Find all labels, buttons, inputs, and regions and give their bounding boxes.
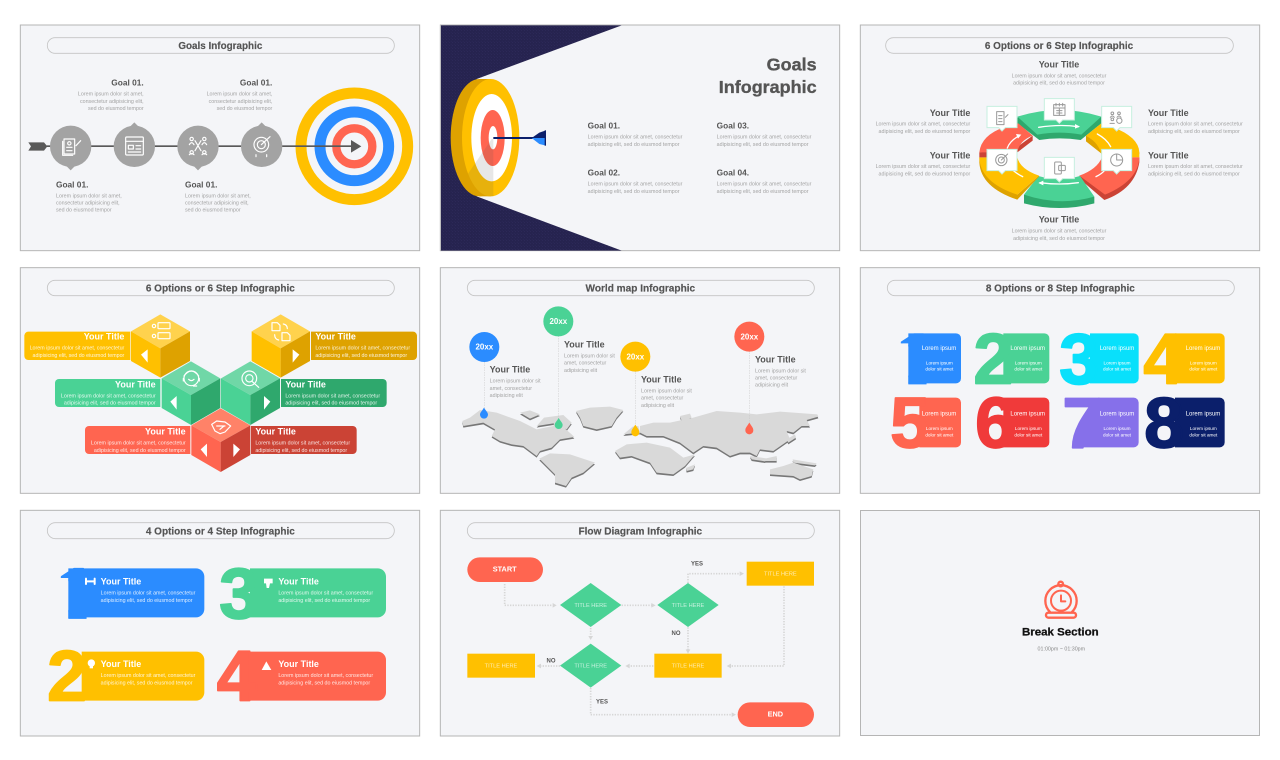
card 3 green: Lorem ipsum dolor sit amet, consectetur xyxy=(278,591,373,597)
icon: network people xyxy=(189,137,207,155)
card 5 xyxy=(890,384,961,464)
connectors xyxy=(505,571,784,717)
title pill xyxy=(467,523,814,539)
text: goal 01: Lorem ipsum dolor sit amet, consectetur xyxy=(588,135,683,141)
text: top xyxy=(1012,59,1107,87)
card 8: Lorem ipsum xyxy=(1186,412,1220,418)
text: goal 02: adipisicing elit, sed do eiusmod tempor xyxy=(588,189,680,195)
card 3 xyxy=(1059,319,1139,399)
text: lower right: adipisicing elit, sed do eiusmod tempor xyxy=(1148,171,1240,177)
decision labels xyxy=(547,562,703,706)
card 7: Lorem ipsum xyxy=(1104,426,1131,431)
bar: dark red right xyxy=(251,426,357,454)
text: goal 04: Lorem ipsum dolor sit amet, consectetur xyxy=(717,182,812,188)
title pill xyxy=(467,280,814,296)
text: goal bottom 1: Goal 01. xyxy=(56,179,88,189)
text: goal top 1 xyxy=(78,78,144,112)
text: goal top 2: Lorem ipsum dolor sit amet, xyxy=(207,92,272,98)
text: lower right: Your Title xyxy=(1148,150,1189,160)
box middle xyxy=(654,654,722,678)
title pill xyxy=(887,280,1234,296)
cube: yellow left xyxy=(131,314,190,378)
callout icon: calendar xyxy=(1044,99,1074,123)
ring segment: left yellow xyxy=(979,157,1039,200)
card 8: dolor sit amet xyxy=(1189,432,1218,437)
text: upper left: Lorem ipsum dolor sit amet, consectetur xyxy=(876,122,971,128)
title pill: 6 Options or 6 Step Infographic xyxy=(146,284,295,295)
text: green xyxy=(564,340,615,374)
card 1: Lorem ipsum xyxy=(922,346,956,352)
card 2 yellow: Lorem ipsum dolor sit amet, consectetur xyxy=(101,673,196,679)
text: goal top 2: consectetur adipisicing elit, xyxy=(209,99,272,105)
card 4 red xyxy=(217,637,386,717)
card 2 yellow: 2 xyxy=(47,637,87,717)
title pill xyxy=(886,38,1233,53)
text: top: adipisicing elit, sed do eiusmod tempor xyxy=(1013,81,1105,87)
bar: dark yellow right: Your Title xyxy=(315,332,356,342)
dart xyxy=(493,130,546,146)
break time: 01:00pm ~ 01:30pm xyxy=(1038,647,1086,653)
decision labels: NO xyxy=(547,658,556,664)
cube: red xyxy=(191,408,250,472)
step circles xyxy=(50,122,282,170)
start pill: START xyxy=(493,565,517,574)
world map xyxy=(462,407,818,488)
box left xyxy=(467,654,535,678)
text: goal bottom 1: Lorem ipsum dolor sit amet, xyxy=(56,193,122,199)
card 3 green: Your Title xyxy=(278,577,319,587)
text: goal 03: Goal 03. xyxy=(717,120,749,130)
card 7 xyxy=(1062,384,1139,464)
box left: TITLE HERE xyxy=(485,664,518,670)
text: goal 02: Goal 02. xyxy=(588,168,620,178)
callout icon: document xyxy=(987,106,1017,131)
diamond 1: TITLE HERE xyxy=(574,603,607,609)
panel: 8 step numbers xyxy=(860,268,1260,493)
text: goal 01: Goal 01. xyxy=(588,120,620,130)
card 7: 7 xyxy=(1062,384,1102,464)
card 2 yellow: Your Title xyxy=(101,659,141,669)
card 5: dolor sit amet xyxy=(925,432,954,437)
bar: red left xyxy=(85,426,190,454)
cube: green left xyxy=(162,361,220,425)
marker: blue: 20xx xyxy=(475,343,494,352)
card 1 xyxy=(900,333,961,384)
card 2: 2 xyxy=(973,319,1013,399)
bar: red left: Your Title xyxy=(145,427,186,437)
card 3: dolor sit amet xyxy=(1103,367,1132,372)
text: goal top 2: sed do eiusmod tempor xyxy=(217,106,273,112)
card 3 green: adipisicing elit, sed do eiusmod tempor xyxy=(278,598,370,604)
text: goal top 1: Goal 01. xyxy=(111,78,144,88)
marker: green: 20xx xyxy=(549,317,568,326)
heading: Infographic xyxy=(719,77,817,97)
box top right: TITLE HERE xyxy=(764,572,797,578)
bar: green left: adipisicing elit, sed do eiusmod tempor xyxy=(64,401,156,407)
text: lower left: Lorem ipsum dolor sit amet, consectetur xyxy=(876,164,971,170)
panel: 6 step cubes xyxy=(20,268,420,493)
text: red xyxy=(755,355,806,389)
card 2 xyxy=(973,319,1049,399)
text: goal 04 xyxy=(717,168,812,195)
text: yellow: Lorem ipsum dolor sit xyxy=(641,388,692,394)
text: goal 04: Goal 04. xyxy=(717,168,749,178)
bar: red left: adipisicing elit, sed do eiusmod tempor xyxy=(94,448,186,454)
start pill xyxy=(467,557,543,582)
text: lower left xyxy=(876,150,971,177)
box top right xyxy=(747,562,814,586)
card 3 green xyxy=(219,554,386,634)
text: lower left: adipisicing elit, sed do eiusmod tempor xyxy=(879,171,971,177)
bar: dark yellow right: adipisicing elit, sed do eiusmod tempor xyxy=(315,353,407,359)
card 1 blue: 1 xyxy=(57,554,97,634)
text: goal 01 xyxy=(588,120,683,148)
panel: world map xyxy=(440,268,840,493)
card 4: Lorem ipsum xyxy=(1190,360,1217,365)
card 8 xyxy=(1144,384,1225,464)
panel: 6 step ring xyxy=(860,25,1260,251)
card 6: Lorem ipsum xyxy=(1015,426,1042,431)
bar: yellow left xyxy=(24,332,130,360)
card 4 red: Lorem ipsum dolor sit amet, consectetur xyxy=(278,673,373,679)
card 4 xyxy=(1143,319,1225,399)
card 4 red: adipisicing elit, sed do eiusmod tempor xyxy=(278,680,370,686)
target rings xyxy=(301,93,408,200)
text: goal bottom 2 xyxy=(185,179,251,214)
card 2: dolor sit amet xyxy=(1014,367,1043,372)
ring segment: bottom green xyxy=(1024,176,1094,208)
bar: red left: Lorem ipsum dolor sit amet, consectetur xyxy=(91,441,186,447)
card 3: Lorem ipsum xyxy=(1100,346,1134,352)
text: top: Your Title xyxy=(1039,59,1079,69)
title pill: Goals Infographic xyxy=(178,41,263,52)
icon: target with dart xyxy=(254,137,270,157)
3D target xyxy=(451,79,519,201)
end pill: END xyxy=(768,710,783,719)
bar: dark red right: adipisicing elit, sed do eiusmod tempor xyxy=(255,448,347,454)
break heading: Break Section xyxy=(1022,626,1099,638)
ring segment: right yellow xyxy=(1086,123,1139,157)
card 8: 8 xyxy=(1144,384,1184,464)
bar: green left xyxy=(55,379,160,407)
text: blue: adipisicing elit xyxy=(490,393,523,399)
panel: goals infographic timeline xyxy=(20,25,420,251)
card 4 red: 4 xyxy=(217,637,257,717)
callout icon: target xyxy=(987,149,1017,174)
card 4: Lorem ipsum xyxy=(1186,346,1220,352)
card 1 blue: Lorem ipsum dolor sit amet, consectetur xyxy=(101,591,196,597)
heading xyxy=(719,55,817,97)
text: bottom: adipisicing elit, sed do eiusmod tempor xyxy=(1013,236,1105,242)
text: goal top 2 xyxy=(207,78,273,112)
title pill: 4 Options or 4 Step Infographic xyxy=(146,526,295,537)
text: upper left: Your Title xyxy=(930,108,970,118)
diamond 3: TITLE HERE xyxy=(574,664,607,670)
text: red: amet, consectetur xyxy=(755,376,798,382)
card 6: 6 xyxy=(975,384,1015,464)
card 1: dolor sit amet xyxy=(925,367,954,372)
text: goal bottom 2: Lorem ipsum dolor sit amet, xyxy=(185,193,251,199)
title pill xyxy=(47,523,394,539)
text: upper right xyxy=(1148,108,1243,135)
text: goal 01: adipisicing elit, sed do eiusmod tempor xyxy=(588,142,680,148)
text: green: amet, consectetur xyxy=(564,361,607,367)
text: red: adipisicing elit xyxy=(755,383,789,389)
card 6: dolor sit amet xyxy=(1014,432,1043,437)
card 7: Lorem ipsum xyxy=(1100,412,1134,418)
icon: pocket clock xyxy=(1045,582,1077,618)
text: yellow: adipisicing elit xyxy=(641,403,675,409)
title pill: World map Infographic xyxy=(585,284,695,295)
text: green: adipisicing elit xyxy=(564,368,598,374)
text: goal 03 xyxy=(717,120,812,148)
end pill xyxy=(738,702,814,727)
text: goal bottom 1: consectetur adipisicing elit, xyxy=(56,201,120,207)
diamond 1 xyxy=(560,583,621,627)
text: lower left: Your Title xyxy=(930,150,970,160)
heading: Goals xyxy=(767,55,817,75)
bar: dark red right: Your Title xyxy=(255,427,296,437)
icon: browser window xyxy=(126,137,143,155)
text: goal 02 xyxy=(588,168,683,195)
decision labels: NO xyxy=(672,631,681,637)
bar: green left: Lorem ipsum dolor sit amet, consectetur xyxy=(61,394,156,400)
text: top: Lorem ipsum dolor sit amet, consectetur xyxy=(1012,73,1107,79)
text: blue: amet, consectetur xyxy=(490,386,532,392)
card 4 red: Your Title xyxy=(278,659,319,669)
ring segment: right red xyxy=(1079,157,1139,200)
text: goal 04: adipisicing elit, sed do eiusmod tempor xyxy=(717,189,809,195)
ring segment: top green xyxy=(1017,110,1101,140)
cube: yellow right xyxy=(252,314,310,378)
panel: 4 step numbers xyxy=(20,510,420,736)
card 7: dolor sit amet xyxy=(1103,432,1132,437)
text: green: Your Title xyxy=(564,340,605,350)
cube: green right xyxy=(221,361,280,425)
bar: dark yellow right xyxy=(311,332,417,360)
panel: goals infographic dart xyxy=(440,25,840,251)
card 3 green: 3 xyxy=(219,554,259,634)
text: goal bottom 2: sed do eiusmod tempor xyxy=(185,208,241,214)
title pill xyxy=(47,38,394,53)
card 1 blue: Your Title xyxy=(101,577,141,587)
bar: dark green right xyxy=(281,379,387,407)
marker: red: 20xx xyxy=(740,332,759,341)
marker: yellow xyxy=(620,342,650,436)
marker: yellow: 20xx xyxy=(626,352,645,361)
panel: break section xyxy=(860,510,1260,736)
title pill: 8 Options or 8 Step Infographic xyxy=(986,284,1135,295)
callout icon: phone message xyxy=(1044,157,1074,182)
bar: dark red right: Lorem ipsum dolor sit amet, consectetur xyxy=(255,441,350,447)
text: bottom: Your Title xyxy=(1039,214,1079,224)
callout icon: pie chart xyxy=(1102,149,1132,174)
diamond 3 xyxy=(560,644,621,688)
text: upper right: adipisicing elit, sed do eiusmod tempor xyxy=(1148,129,1240,135)
card 2 yellow xyxy=(47,637,204,717)
box middle: TITLE HERE xyxy=(672,664,705,670)
card 2: Lorem ipsum xyxy=(1010,346,1045,352)
arrow through target xyxy=(28,140,361,153)
bar: dark green right: Lorem ipsum dolor sit amet, consectetur xyxy=(285,394,380,400)
text: goal bottom 1: sed do eiusmod tempor xyxy=(56,208,112,214)
bar: yellow left: Lorem ipsum dolor sit amet, consectetur xyxy=(30,346,125,352)
bar: green left: Your Title xyxy=(115,380,156,390)
text: blue xyxy=(490,365,541,399)
text: goal bottom 2: Goal 01. xyxy=(185,179,217,189)
text: upper right: Lorem ipsum dolor sit amet, consectetur xyxy=(1148,122,1243,128)
card 4: 4 xyxy=(1143,319,1183,399)
text: goal bottom 1 xyxy=(56,179,122,214)
title pill: Flow Diagram Infographic xyxy=(578,526,702,537)
dark wedge background xyxy=(441,25,622,251)
text: yellow: Your Title xyxy=(641,375,682,385)
bar: dark yellow right: Lorem ipsum dolor sit amet, consectetur xyxy=(315,346,410,352)
diamond 2 xyxy=(657,583,719,627)
text: goal top 2: Goal 01. xyxy=(240,78,272,88)
card 2 yellow: adipisicing elit, sed do eiusmod tempor xyxy=(101,680,193,686)
text: red: Your Title xyxy=(755,355,796,365)
marker: red xyxy=(734,322,764,434)
card 6 xyxy=(975,384,1049,464)
text: goal 02: Lorem ipsum dolor sit amet, consectetur xyxy=(588,182,683,188)
text: goal top 1: Lorem ipsum dolor sit amet, xyxy=(78,92,144,98)
callout icon: people xyxy=(1102,106,1132,131)
card 3: Lorem ipsum xyxy=(1104,360,1131,365)
card 1: Lorem ipsum xyxy=(926,360,953,365)
card 4: dolor sit amet xyxy=(1189,367,1218,372)
text: goal 03: Lorem ipsum dolor sit amet, consectetur xyxy=(717,135,812,141)
card 1 blue xyxy=(60,568,204,619)
title pill: 6 Options or 6 Step Infographic xyxy=(985,41,1133,52)
text: lower right: Lorem ipsum dolor sit amet, consectetur xyxy=(1148,164,1243,170)
text: goal top 1: sed do eiusmod tempor xyxy=(88,106,144,112)
diamond 2: TITLE HERE xyxy=(672,603,705,609)
card 8: Lorem ipsum xyxy=(1190,426,1217,431)
text: goal top 1: consectetur adipisicing elit, xyxy=(80,99,144,105)
text: blue: Lorem ipsum dolor sit xyxy=(490,379,541,385)
text: green: Lorem ipsum dolor sit xyxy=(564,353,615,359)
marker: blue xyxy=(469,332,499,419)
decision labels: YES xyxy=(596,700,608,706)
decision labels: YES xyxy=(691,562,703,568)
bar: dark green right: Your Title xyxy=(285,380,326,390)
text: goal bottom 2: consectetur adipisicing elit, xyxy=(185,201,249,207)
card 1: 1 xyxy=(897,319,937,399)
text: blue: Your Title xyxy=(490,365,530,375)
ring segment: left red xyxy=(979,123,1033,157)
bar: yellow left: Your Title xyxy=(84,332,124,342)
text: upper left xyxy=(876,108,971,135)
text: goal 03: adipisicing elit, sed do eiusmod tempor xyxy=(717,142,809,148)
card 5: 5 xyxy=(890,384,930,464)
title pill xyxy=(47,280,394,296)
text: upper left: adipisicing elit, sed do eiusmod tempor xyxy=(879,129,971,135)
text: red: Lorem ipsum dolor sit xyxy=(755,368,806,374)
icon: document and pen xyxy=(63,139,81,155)
text: yellow xyxy=(641,375,692,409)
text: lower right xyxy=(1148,150,1243,177)
bar: yellow left: adipisicing elit, sed do eiusmod tempor xyxy=(33,353,125,359)
card 3: 3 xyxy=(1059,319,1099,399)
card 1 blue: adipisicing elit, sed do eiusmod tempor xyxy=(101,598,193,604)
text: bottom: Lorem ipsum dolor sit amet, consectetur xyxy=(1012,229,1107,235)
panel: flow diagram xyxy=(440,510,840,736)
text: upper right: Your Title xyxy=(1148,108,1189,118)
card 6: Lorem ipsum xyxy=(1010,412,1045,418)
bar: dark green right: adipisicing elit, sed do eiusmod tempor xyxy=(285,401,377,407)
card 5: Lorem ipsum xyxy=(926,426,953,431)
marker: green xyxy=(543,306,573,429)
text: bottom xyxy=(1012,214,1107,242)
text: yellow: amet, consectetur xyxy=(641,396,684,402)
card 5: Lorem ipsum xyxy=(922,412,956,418)
card 2: Lorem ipsum xyxy=(1015,360,1042,365)
